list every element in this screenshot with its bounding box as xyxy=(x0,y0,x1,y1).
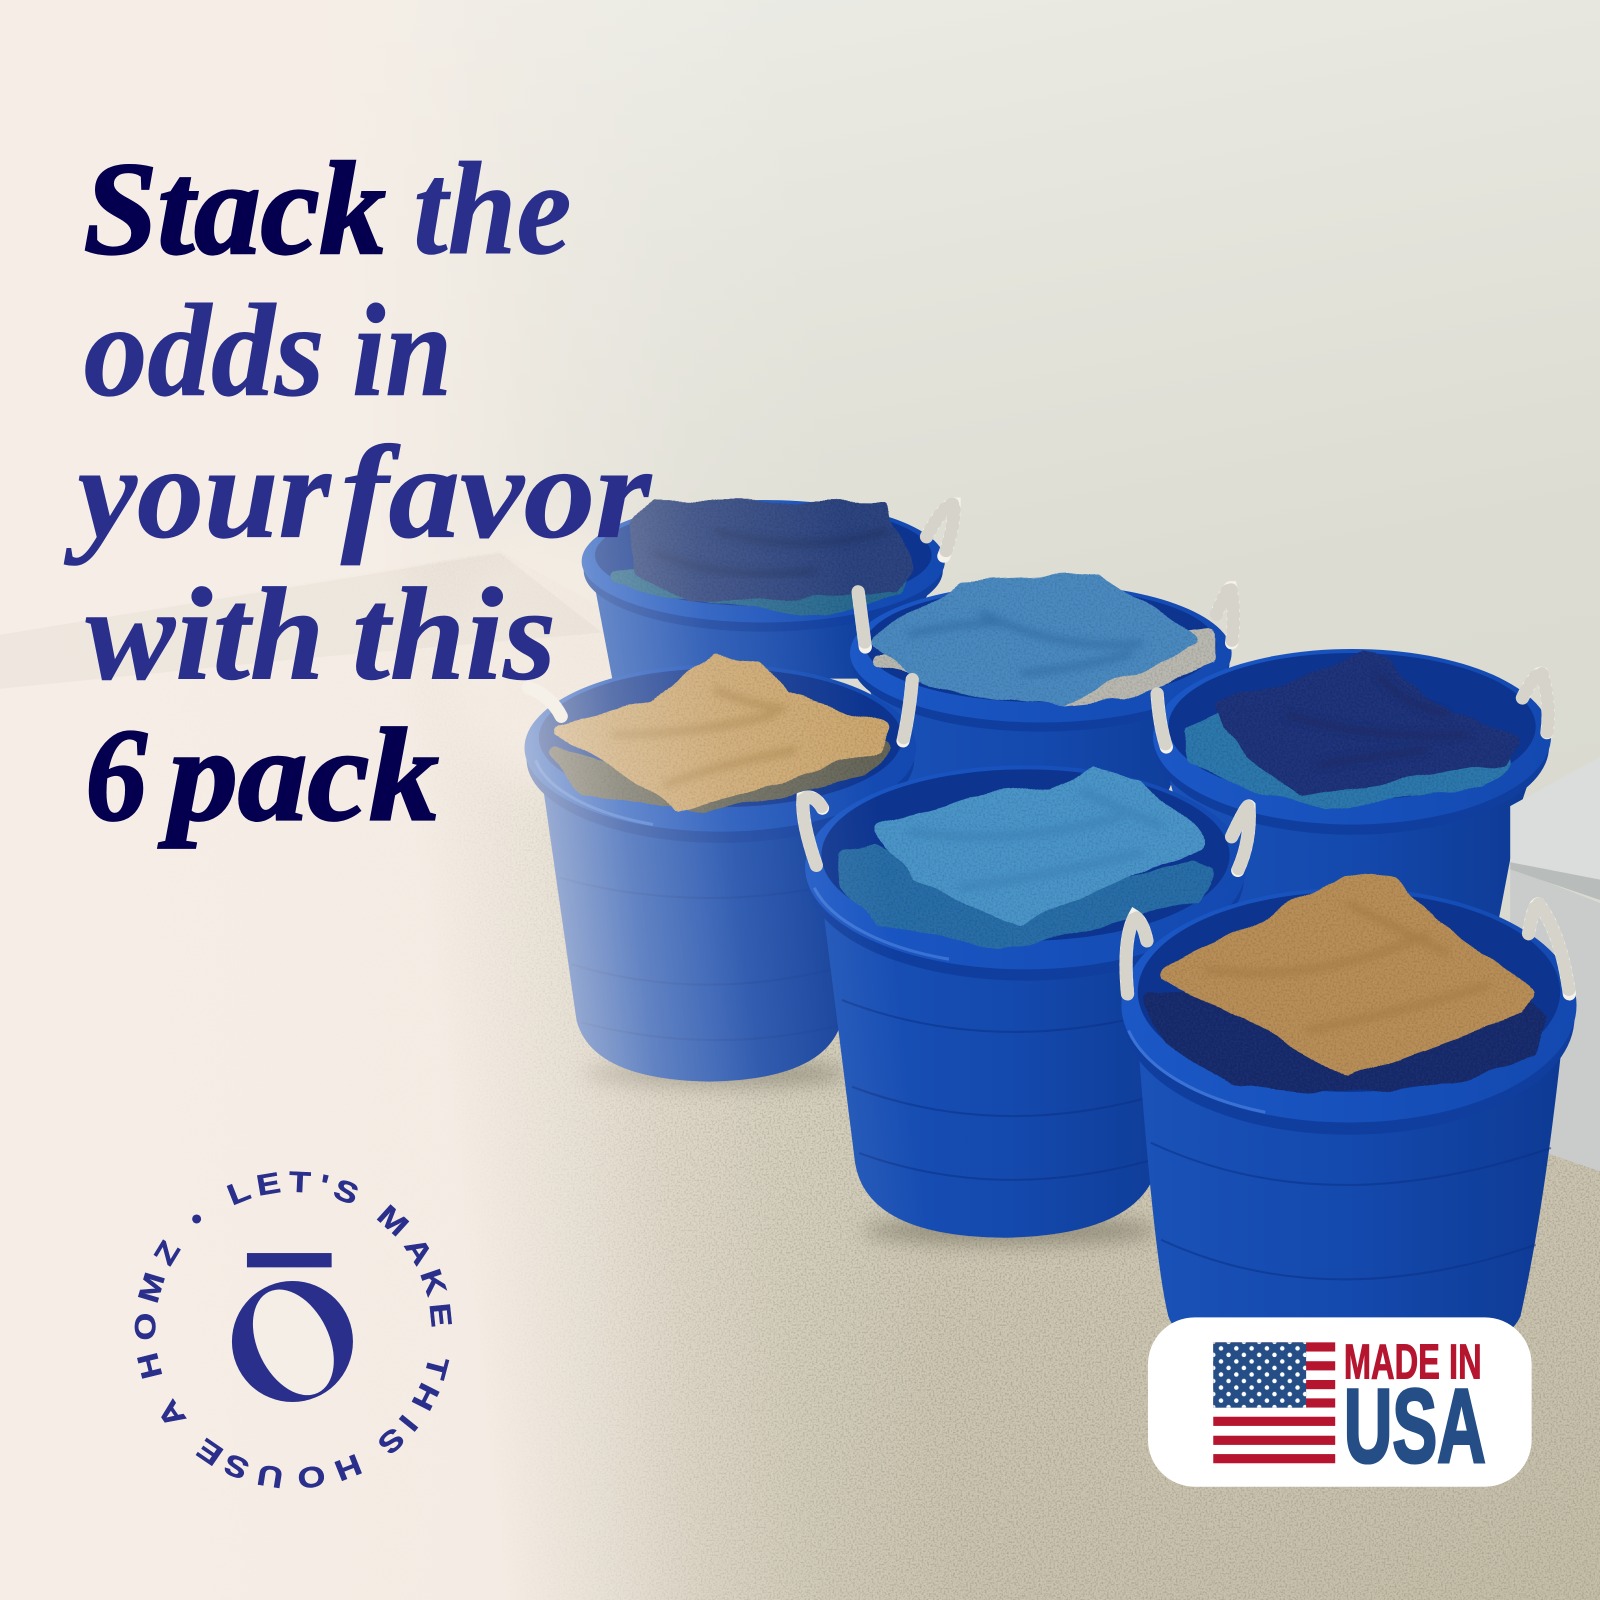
circular slogan: H xyxy=(131,1349,168,1382)
storage box at right xyxy=(1510,757,1600,1171)
logo: circular brand stamp xyxy=(129,1166,458,1495)
circular slogan: O xyxy=(129,1312,162,1341)
faint left wall and floor band xyxy=(0,553,602,689)
circular slogan: O xyxy=(296,1459,327,1495)
tub F: front right with tan clothes xyxy=(1121,880,1577,1367)
circular slogan: T xyxy=(418,1353,455,1383)
American flag xyxy=(1213,1342,1335,1463)
circular slogan: I xyxy=(393,1409,424,1437)
made in label: MADE IN xyxy=(1344,1336,1482,1390)
tub E: center with light blue clothes xyxy=(803,765,1249,1238)
circular slogan: S xyxy=(372,1421,411,1461)
rope handle xyxy=(927,504,954,556)
badge: made in USA xyxy=(1148,1317,1532,1487)
circular slogan: S xyxy=(329,1172,363,1211)
headline: odds xyxy=(84,277,324,424)
logo mark: o with macron xyxy=(232,1253,353,1408)
headline: this xyxy=(352,561,556,708)
circular slogan: A xyxy=(151,1394,192,1434)
rope handles xyxy=(1157,673,1548,747)
tub A: back left with navy clothes xyxy=(582,500,954,679)
headline: Stack xyxy=(84,135,386,282)
circular slogan: M xyxy=(132,1269,171,1306)
headline: the xyxy=(413,135,571,282)
headline: pack xyxy=(158,701,439,848)
circular slogan: H xyxy=(330,1448,366,1487)
circular slogan: A xyxy=(398,1232,439,1271)
circular slogan xyxy=(129,1166,458,1495)
circular slogan: K xyxy=(414,1265,453,1300)
USA label: USA xyxy=(1344,1368,1486,1485)
circular slogan: T xyxy=(288,1166,312,1199)
tub D: left with tan clothes xyxy=(524,661,916,1082)
circular slogan: M xyxy=(371,1199,415,1242)
headline: favor xyxy=(341,419,653,566)
rope handles xyxy=(858,588,1233,647)
circular slogan: E xyxy=(423,1302,458,1328)
headline: with xyxy=(86,561,324,708)
circular slogan: U xyxy=(255,1458,285,1494)
circular slogan: H xyxy=(405,1378,446,1415)
headline: in xyxy=(352,277,452,424)
tub shadows on floor xyxy=(582,1059,1158,1245)
headline: your xyxy=(63,419,332,566)
tub C: right back with navy clothes xyxy=(1153,649,1551,923)
circular slogan: L xyxy=(223,1173,255,1211)
rope handles xyxy=(803,797,1249,870)
rope handles xyxy=(529,680,912,741)
circular slogan: Z xyxy=(148,1235,186,1271)
circular slogan: ' xyxy=(316,1168,331,1202)
circular slogan: E xyxy=(254,1166,283,1202)
background: room wall and floor xyxy=(418,0,1600,1600)
rope handles xyxy=(1126,904,1569,994)
headline: 6 xyxy=(86,701,148,848)
circular slogan: S xyxy=(219,1447,253,1486)
headline xyxy=(63,135,653,848)
circular slogan: E xyxy=(191,1432,229,1472)
tub B: back middle with blue shirt xyxy=(850,579,1233,791)
